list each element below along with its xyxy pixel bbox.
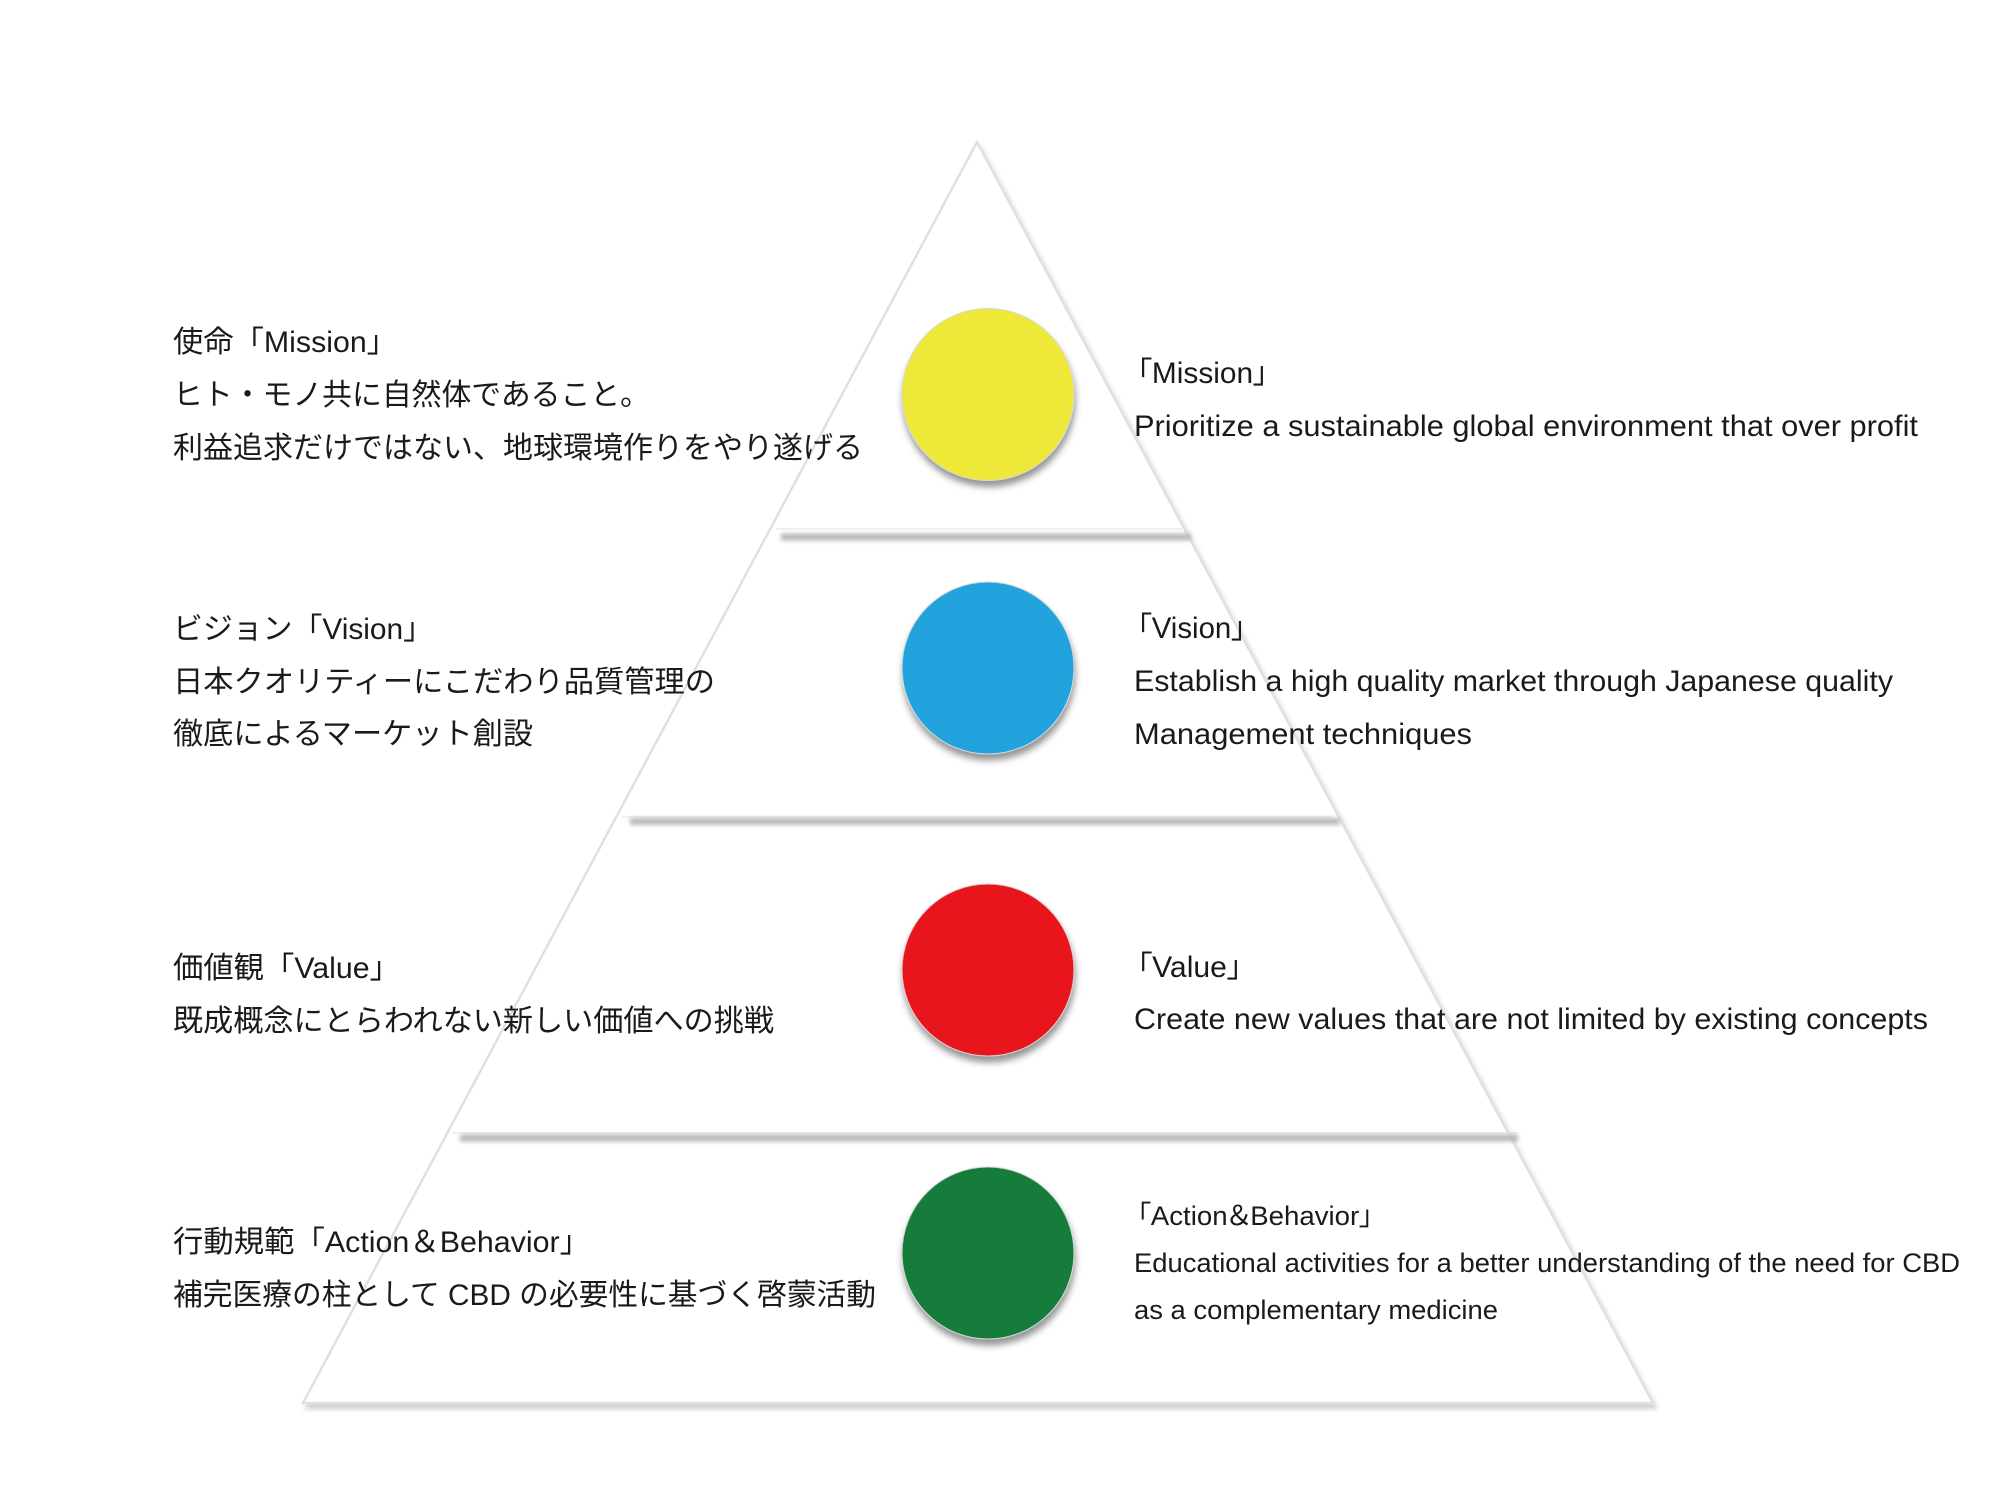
text block: English action and behavior: Educational activities for a better understanding of the need for CBD xyxy=(1134,1248,1960,1278)
text block: Japanese value: 価値観「Value」 xyxy=(173,952,400,985)
divider: value and action tiers xyxy=(452,1133,1518,1142)
text block: English vision: 「Vision」 xyxy=(1137,612,1246,645)
circle: red value xyxy=(902,884,1074,1056)
circle: green action xyxy=(902,1167,1074,1339)
text block: English action and behavior: 「Action＆Behavior」 xyxy=(1137,1201,1373,1231)
text block: English vision xyxy=(1134,612,1893,751)
text block: Japanese mission: 使命「Mission」 xyxy=(173,326,397,359)
text block: Japanese action and behavior: 行動規範「Action＆Behavior」 xyxy=(173,1226,590,1259)
text block: English value: 「Value」 xyxy=(1137,951,1242,984)
text block: English mission xyxy=(1134,357,1919,443)
text block: English vision: Management techniques xyxy=(1134,718,1472,751)
text block: Japanese vision: 日本クオリティーにこだわり品質管理の xyxy=(173,666,715,699)
text block: Japanese value xyxy=(173,952,774,1038)
text block: Japanese action and behavior: 補完医療の柱として CBD の必要性に基づく啓蒙活動 xyxy=(173,1279,876,1312)
text block: English action and behavior: as a complementary medicine xyxy=(1134,1295,1498,1325)
text block: Japanese mission: 利益追求だけではない、地球環境作りをやり遂げる xyxy=(173,432,863,465)
text block: English value: Create new values that are not limited by existing concepts xyxy=(1134,1003,1928,1036)
text block: English vision: Establish a high quality market through Japanese quality xyxy=(1134,665,1893,698)
divider: vision and value tiers xyxy=(622,817,1340,825)
text block: Japanese vision: ビジョン「Vision」 xyxy=(173,613,433,646)
circle: blue vision xyxy=(902,582,1074,754)
text block: Japanese action and behavior xyxy=(173,1226,876,1312)
circle: yellow mission xyxy=(902,308,1074,480)
text block: Japanese mission xyxy=(173,326,863,465)
divider: mission and vision tiers xyxy=(776,529,1191,540)
text block: English action and behavior xyxy=(1134,1201,1960,1325)
text block: Japanese mission: ヒト・モノ共に自然体であること。 xyxy=(173,379,650,412)
text block: English mission: 「Mission」 xyxy=(1137,357,1268,390)
text block: Japanese value: 既成概念にとらわれない新しい価値への挑戦 xyxy=(173,1005,774,1038)
pyramid outline xyxy=(303,142,1653,1403)
text block: Japanese vision xyxy=(173,613,715,751)
text block: Japanese vision: 徹底によるマーケット創設 xyxy=(173,718,533,751)
text block: English value xyxy=(1134,951,1928,1036)
text block: English mission: Prioritize a sustainable global environment that over profit xyxy=(1134,410,1919,443)
